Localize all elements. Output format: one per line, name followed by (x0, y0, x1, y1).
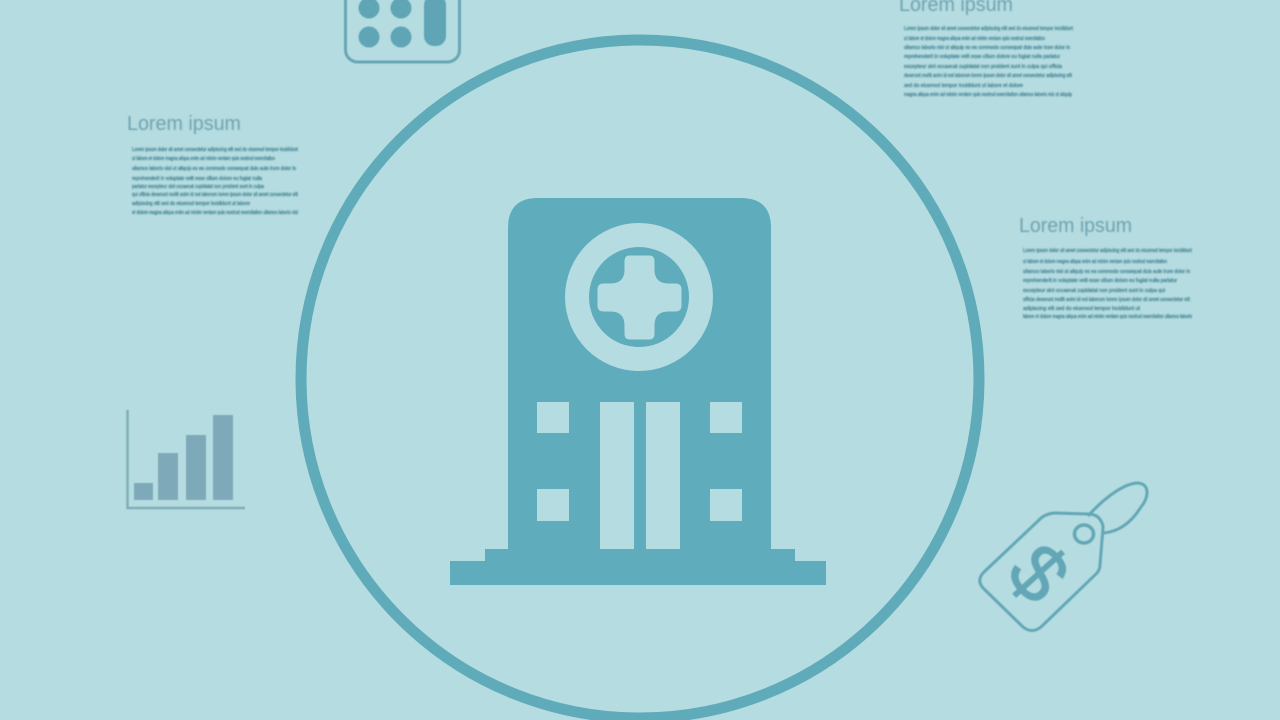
heading: left: Lorem ipsum (127, 113, 241, 135)
body copy: top right: excepteur sint occaecat cupidatat non proident sunt in culpa qui officia (904, 64, 1062, 70)
body copy: right: adipiscing elit sed do eiusmod tempor incididunt ut (1023, 306, 1141, 312)
body copy: right (1023, 248, 1193, 320)
body copy: top right (904, 26, 1074, 98)
body copy: top right: ullamco laboris nisi ut aliquip ex ea commodo consequat duis aute irure dolor in (904, 45, 1070, 51)
bar chart (128, 410, 245, 508)
body copy: top right: magna aliqua enim ad minim veniam quis nostrud exercitation ullamco laboris nisi ut aliquip (904, 92, 1072, 98)
icon: medical cross (598, 256, 682, 340)
icon: hospital building (450, 198, 826, 585)
body copy: left: adipiscing elit sed do eiusmod tempor incididunt ut labore (132, 201, 250, 207)
dollar sign: $ (991, 527, 1087, 619)
building windows and doors (537, 402, 742, 549)
body copy: right: Lorem ipsum dolor sit amet consectetur adipiscing elit sed do eiusmod tempor incididunt (1023, 248, 1193, 254)
body copy: top right: reprehenderit in voluptate velit esse cillum dolore eu fugiat nulla pariatur (904, 54, 1060, 60)
body copy: right: ullamco laboris nisi ut aliquip ex ea commodo consequat duis aute irure dolor in (1023, 269, 1190, 275)
body copy: top right: ut labore et dolore magna aliqua enim ad minim veniam quis nostrud exercitation (904, 36, 1045, 42)
tag outline (980, 513, 1103, 630)
body copy: right: labore et dolore magna aliqua enim ad minim veniam quis nostrud exercitation ullamco laboris (1023, 314, 1192, 320)
body copy: left: Lorem ipsum dolor sit amet consectetur adipiscing elit sed do eiusmod tempor incididunt (132, 147, 299, 153)
icon: price tag (980, 483, 1147, 630)
chart bars (134, 415, 233, 500)
body copy: right: reprehenderit in voluptate velit esse cillum dolore eu fugiat nulla pariatur (1023, 278, 1177, 284)
body copy: left (132, 147, 299, 216)
body copy: left: reprehenderit in voluptate velit esse cillum dolore eu fugiat nulla (132, 176, 262, 182)
heading: right: Lorem ipsum (1019, 215, 1132, 237)
body copy: left: ut labore et dolore magna aliqua enim ad minim veniam quis nostrud exercitation (132, 156, 275, 162)
body copy: left: et dolore magna aliqua enim ad minim veniam quis nostrud exercitation ullamco laboris nisi (132, 210, 298, 216)
chart axes (128, 410, 245, 508)
text block: left (127, 113, 299, 216)
body copy: left: pariatur excepteur sint occaecat cupidatat non proident sunt in culpa (132, 184, 264, 190)
body copy: top right: sed do eiusmod tempor incididunt ut labore et dolore (904, 83, 1023, 89)
tag hole (1074, 525, 1094, 543)
body copy: top right: Lorem ipsum dolor sit amet consectetur adipiscing elit sed do eiusmod tempor incididunt (904, 26, 1074, 32)
body copy: left: qui officia deserunt mollit anim id est laborum lorem ipsum dolor sit amet consectetur elit (132, 192, 299, 198)
large circle ring (301, 40, 979, 718)
text block: top right (899, 0, 1074, 98)
text block: right (1019, 215, 1193, 320)
body copy: left: ullamco laboris nisi ut aliquip ex ea commodo consequat duis aute irure dolor in (132, 166, 296, 172)
body copy: right: officia deserunt mollit anim id est laborum lorem ipsum dolor sit amet consectetur elit (1023, 297, 1191, 303)
icon: calendar (346, 0, 460, 62)
body copy: top right: deserunt mollit anim id est laborum lorem ipsum dolor sit amet consectetur adipiscing elit (904, 73, 1073, 79)
body copy: right: excepteur sint occaecat cupidatat non proident sunt in culpa qui (1023, 288, 1165, 294)
body copy: right: ut labore et dolore magna aliqua enim ad minim veniam quis nostrud exercitation (1023, 259, 1167, 265)
tag string loop (1088, 483, 1147, 533)
